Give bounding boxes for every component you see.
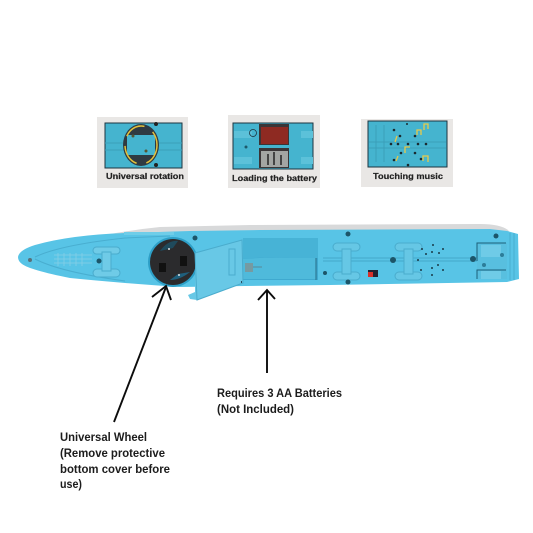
universal wheel bbox=[148, 237, 198, 287]
arrow: to battery compartment bbox=[258, 290, 275, 373]
product: train underside bbox=[18, 224, 519, 300]
icon: rotating wheel bbox=[123, 122, 159, 167]
callout: universal wheel: use) bbox=[60, 477, 82, 491]
battery spring bbox=[246, 263, 252, 272]
panel: touching music bbox=[361, 119, 453, 187]
battery compartment bbox=[243, 238, 318, 280]
callout: universal wheel: Universal Wheel bbox=[60, 430, 147, 444]
blue hull bbox=[18, 229, 519, 287]
arrow: to universal wheel bbox=[114, 286, 171, 422]
callout: universal wheel: bottom cover before bbox=[60, 462, 170, 476]
callout: universal wheel bbox=[60, 430, 170, 491]
wheel axle: front bbox=[93, 247, 120, 277]
battery door bbox=[188, 240, 243, 300]
wheel axle: rear 2 bbox=[395, 243, 422, 280]
rear bogie bbox=[477, 243, 507, 279]
wheel axle: rear 1 bbox=[333, 243, 360, 280]
caption: touching music: Touching music bbox=[373, 171, 443, 181]
speaker holes bbox=[417, 244, 444, 276]
caption: universal rotation: Universal rotation bbox=[106, 171, 184, 181]
screws bbox=[192, 232, 498, 284]
callout: batteries: (Not Included) bbox=[217, 402, 294, 416]
grey top edge bbox=[100, 224, 512, 236]
caption: loading the battery: Loading the battery bbox=[232, 173, 317, 183]
callout: universal wheel: (Remove protective bbox=[60, 446, 165, 460]
power switch bbox=[368, 270, 378, 277]
icon: speaker holes and music notes bbox=[386, 123, 428, 166]
panel: universal rotation bbox=[97, 117, 188, 188]
front grille bbox=[54, 253, 92, 266]
callout: batteries bbox=[217, 386, 342, 416]
icon: battery compartment bbox=[234, 124, 313, 168]
panel: loading the battery bbox=[228, 115, 320, 188]
callout: batteries: Requires 3 AA Batteries bbox=[217, 386, 342, 400]
